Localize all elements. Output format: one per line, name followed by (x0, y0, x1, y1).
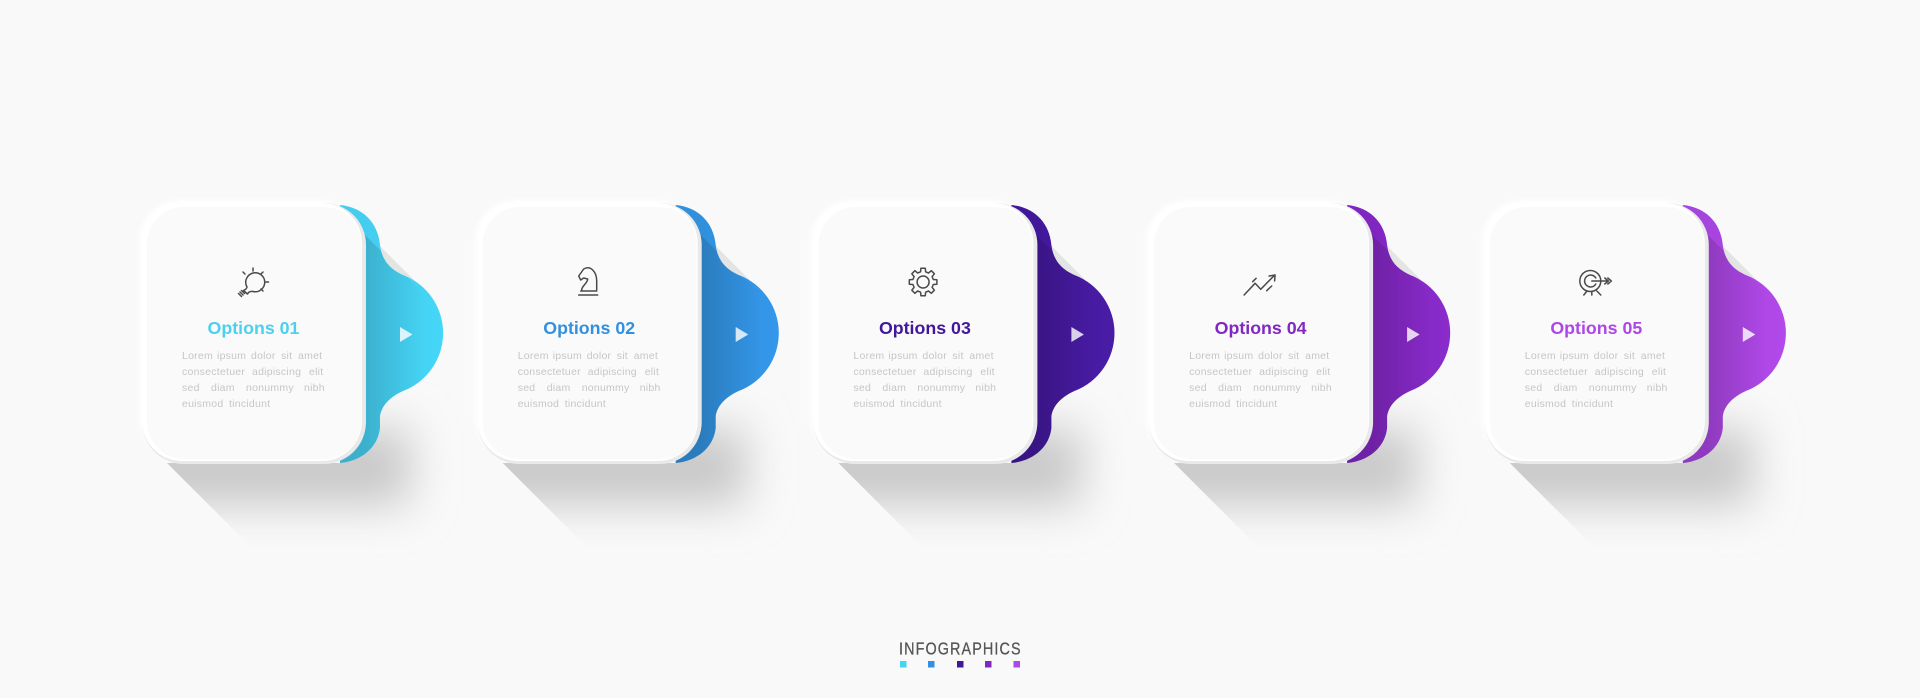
long shadow (1127, 425, 1417, 505)
body text: amet (298, 350, 322, 362)
icon: play triangle (400, 327, 412, 342)
body text: elit (309, 366, 323, 378)
card (142, 203, 366, 464)
body text: consectetuer (518, 366, 581, 378)
body text: sed (1525, 382, 1542, 394)
body text: tincidunt (1236, 398, 1277, 410)
body text: Lorem (1525, 350, 1556, 362)
body text: dolor (587, 350, 612, 362)
card (478, 203, 702, 464)
icon: chess knight (579, 268, 598, 295)
icon: target with arrow (1580, 270, 1611, 295)
body text: tincidunt (900, 398, 942, 410)
body text: nibh (1311, 382, 1332, 394)
body text: dolor (251, 350, 276, 362)
body text: sit (1288, 350, 1299, 362)
body text: nonummy (582, 382, 630, 394)
body text: sit (952, 350, 964, 362)
body text: sit (617, 350, 628, 362)
body text: consectetuer (1189, 366, 1252, 378)
body text: sit (1624, 350, 1635, 362)
body text: ipsum (888, 350, 918, 362)
icon: gear (909, 268, 937, 296)
body text: Lorem (182, 350, 213, 362)
body text: adipiscing (252, 366, 301, 378)
card (1149, 203, 1373, 464)
body text: euismod (1525, 398, 1566, 410)
icon: play triangle (736, 327, 748, 342)
body text: ipsum (1224, 350, 1253, 362)
body text: elit (980, 366, 995, 378)
body text: euismod (1189, 398, 1231, 410)
colored tab (1682, 205, 1786, 463)
colored tab (340, 205, 444, 463)
icon: light bulb (238, 268, 268, 296)
body text: ipsum (217, 350, 246, 362)
heading: Options 05 (1550, 318, 1642, 338)
body text: elit (645, 366, 659, 378)
body text: Lorem (853, 350, 884, 362)
body text: dolor (922, 350, 947, 362)
body text: amet (1305, 350, 1329, 362)
body text: adipiscing (1259, 366, 1308, 378)
neck shadow (1049, 244, 1085, 282)
card (1485, 203, 1709, 464)
neck shadow (1721, 244, 1757, 282)
colored tab (1347, 205, 1450, 463)
body text: diam (1218, 382, 1242, 394)
colored tab (1011, 205, 1114, 463)
footer title: INFOGRAPHICS (899, 639, 1021, 659)
body text: consectetuer (853, 366, 917, 378)
body text: nonummy (1253, 382, 1301, 394)
long shadow (1463, 425, 1753, 505)
long shadow (456, 425, 746, 505)
step 3 (791, 200, 1141, 505)
body text: amet (634, 350, 658, 362)
body text: diam (882, 382, 906, 394)
body text: sit (281, 350, 292, 362)
body text: dolor (1258, 350, 1283, 362)
body text: nibh (640, 382, 661, 394)
footer color squares (900, 661, 1020, 668)
body text: adipiscing (588, 366, 637, 378)
body text: sed (853, 382, 871, 394)
icon: rising arrow (1244, 275, 1275, 295)
body text: elit (1316, 366, 1331, 378)
body text: sed (1189, 382, 1207, 394)
body text: sed (518, 382, 535, 394)
card glow (1146, 200, 1366, 458)
body text: elit (1652, 366, 1666, 378)
body text: tincidunt (229, 398, 270, 410)
body text: Lorem (518, 350, 549, 362)
icon: play triangle (1743, 327, 1755, 342)
body text: ipsum (553, 350, 582, 362)
step 4 (1127, 200, 1477, 505)
body text: euismod (518, 398, 559, 410)
body text: diam (211, 382, 235, 394)
neck shadow (714, 244, 750, 282)
body text: amet (969, 350, 994, 362)
body text: euismod (182, 398, 223, 410)
body text: nibh (975, 382, 996, 394)
card (813, 203, 1037, 464)
body text: diam (547, 382, 570, 394)
body text: consectetuer (182, 366, 245, 378)
body text: nibh (1647, 382, 1668, 394)
heading: Options 04 (1215, 318, 1307, 338)
long shadow (120, 425, 410, 505)
body text: sed (182, 382, 200, 394)
body text: amet (1641, 350, 1665, 362)
body text: euismod (853, 398, 895, 410)
body text: Lorem (1189, 350, 1220, 362)
body text: nonummy (246, 382, 294, 394)
icon: play triangle (1407, 327, 1420, 342)
heading: Options 03 (879, 318, 971, 338)
body text: consectetuer (1525, 366, 1588, 378)
body text: diam (1554, 382, 1578, 394)
card glow (810, 200, 1030, 458)
card glow (475, 200, 695, 458)
long shadow (791, 425, 1081, 505)
card glow (139, 200, 359, 458)
body text: nonummy (1589, 382, 1637, 394)
body text: ipsum (1560, 350, 1589, 362)
step 2 (456, 200, 806, 505)
card glow (1482, 200, 1702, 458)
heading: Options 01 (208, 318, 300, 338)
body text: nibh (304, 382, 325, 394)
step 1 (120, 200, 470, 505)
body text: tincidunt (565, 398, 606, 410)
body text: tincidunt (1572, 398, 1613, 410)
colored tab (676, 205, 779, 463)
body text: adipiscing (1595, 366, 1644, 378)
body text: dolor (1594, 350, 1619, 362)
neck shadow (1385, 244, 1421, 282)
body text: adipiscing (923, 366, 973, 378)
body text: nonummy (917, 382, 966, 394)
neck shadow (378, 244, 414, 282)
heading: Options 02 (543, 318, 635, 338)
icon: play triangle (1071, 327, 1084, 342)
step 5 (1463, 200, 1813, 505)
